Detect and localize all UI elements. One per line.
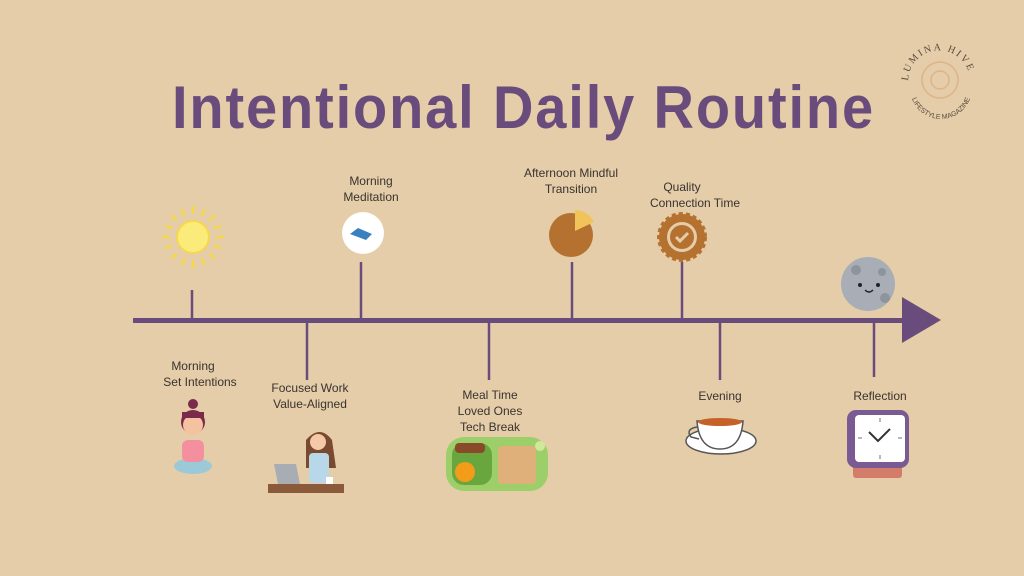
label: morning meditation: Meditation bbox=[343, 190, 399, 204]
label: morning set intentions: Morning bbox=[171, 359, 215, 373]
label: morning meditation: Morning bbox=[349, 174, 393, 188]
icon: lunchbox bbox=[446, 437, 548, 491]
label: meal time: Meal Time bbox=[462, 388, 518, 402]
timeline arrow bbox=[133, 262, 941, 380]
label: morning set intentions bbox=[163, 359, 237, 389]
logo: Lumina Hive: LIFESTYLE MAGAZINE bbox=[912, 97, 970, 119]
icon: pie bbox=[549, 210, 594, 257]
label: morning set intentions: Set Intentions bbox=[163, 375, 237, 389]
label: evening: Evening bbox=[698, 389, 742, 403]
label: focused work: Value-Aligned bbox=[273, 397, 347, 411]
label: meal time: Loved Ones bbox=[458, 404, 522, 418]
label: focused work bbox=[271, 381, 350, 411]
label: reflection: Reflection bbox=[853, 389, 907, 403]
icon: sun bbox=[163, 207, 223, 267]
label: meal time bbox=[458, 388, 522, 434]
icon: meditating girl bbox=[174, 399, 212, 474]
title: Intentional Daily Routine bbox=[172, 74, 875, 141]
logo: Lumina Hive bbox=[902, 44, 974, 119]
label: afternoon: Transition bbox=[545, 182, 597, 196]
logo: Lumina Hive: LUMINA HIVE bbox=[902, 44, 974, 81]
label: quality connection: Quality bbox=[663, 180, 701, 194]
icon: badge bbox=[659, 214, 705, 260]
label: afternoon: Afternoon Mindful bbox=[524, 166, 618, 180]
label: afternoon bbox=[524, 166, 618, 196]
icon: woman at laptop bbox=[268, 432, 344, 493]
icon: clock bbox=[847, 410, 909, 478]
icon: moon bbox=[841, 257, 895, 311]
label: focused work: Focused Work bbox=[271, 381, 350, 395]
icon: meditation hand bbox=[342, 212, 384, 254]
label: meal time: Tech Break bbox=[460, 420, 521, 434]
label: morning meditation bbox=[343, 174, 399, 204]
label: quality connection: Connection Time bbox=[650, 196, 740, 210]
label: quality connection bbox=[650, 180, 740, 210]
icon: teacup bbox=[686, 418, 756, 454]
